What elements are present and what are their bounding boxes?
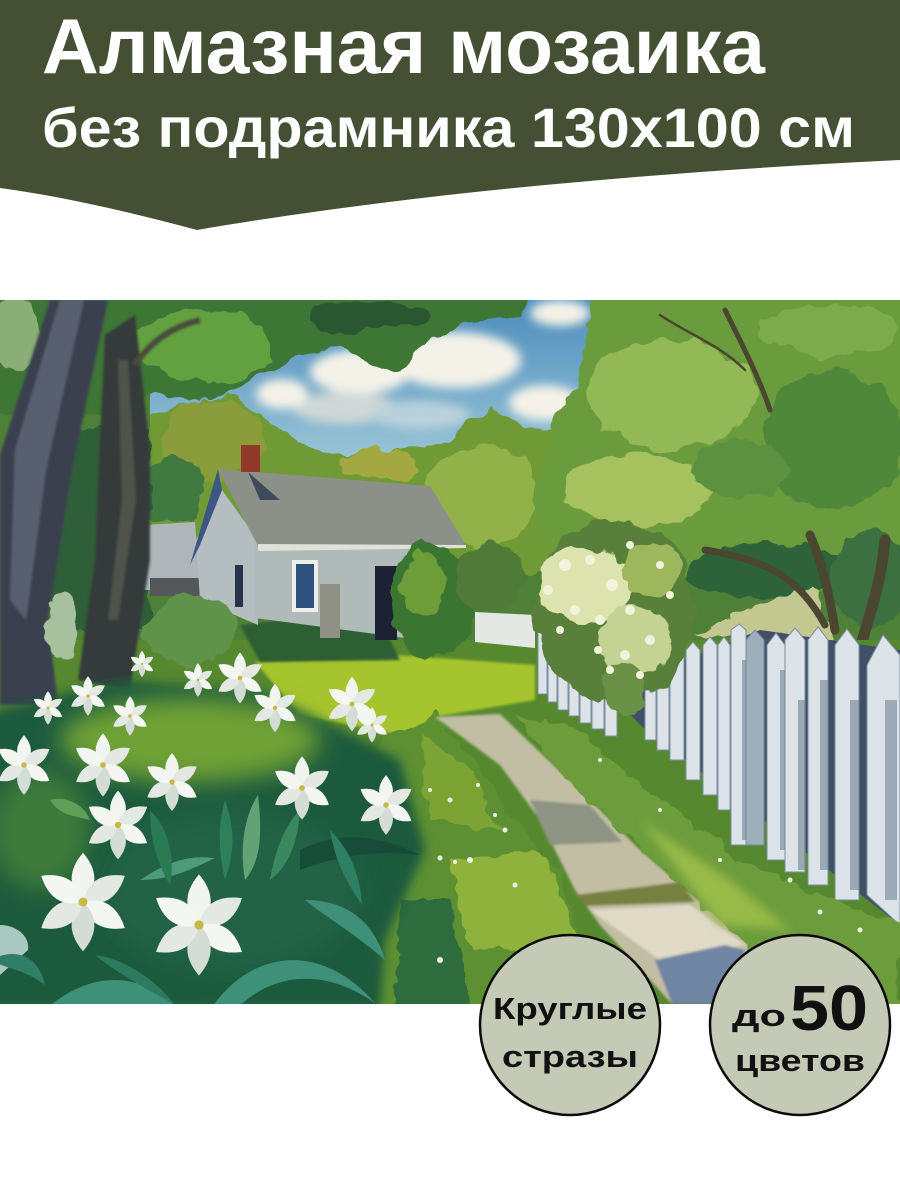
badge: round rhinestones bbox=[480, 935, 660, 1115]
badge: up to 50 colours: 50 bbox=[790, 972, 868, 1044]
dark hedge behind lawn bbox=[240, 615, 400, 662]
sky bbox=[150, 300, 591, 457]
clouds bbox=[256, 300, 590, 429]
subtitle: без подрамника 130х100 см bbox=[42, 96, 855, 159]
right tree foliage bbox=[530, 290, 900, 640]
cottage walls bbox=[196, 490, 258, 625]
picket fence bbox=[536, 624, 900, 925]
chimney bbox=[241, 445, 260, 472]
door bbox=[375, 566, 397, 640]
grass along fence bbox=[515, 715, 900, 1010]
fence shadows bbox=[742, 660, 897, 900]
back shed bbox=[142, 522, 200, 596]
ground bbox=[0, 640, 900, 1004]
lawn bbox=[255, 655, 535, 735]
lily flowers bbox=[0, 651, 415, 976]
flowering bush bbox=[535, 520, 695, 716]
badge: round rhinestones: стразы bbox=[502, 1039, 638, 1074]
top left canopy bbox=[0, 300, 528, 418]
banner shape bbox=[0, 0, 900, 230]
painting: summer cottage garden bbox=[0, 280, 900, 1010]
lily bed bbox=[0, 651, 425, 1010]
header banner bbox=[0, 0, 900, 230]
porch post bbox=[320, 584, 340, 638]
base colour bbox=[0, 394, 900, 640]
bush blossoms bbox=[543, 541, 674, 679]
stone path bbox=[435, 714, 750, 1004]
white meadow flowers bbox=[428, 758, 862, 963]
badge: up to 50 colours bbox=[710, 935, 890, 1115]
right tree branches bbox=[660, 310, 885, 650]
lily leaves bbox=[0, 795, 420, 1010]
cottage bbox=[190, 445, 466, 640]
left tree trunks bbox=[0, 300, 200, 705]
distant white fence bbox=[475, 612, 535, 648]
badge: round rhinestones: Круглые bbox=[493, 991, 647, 1026]
bush by cottage bbox=[390, 542, 524, 658]
cottage roof bbox=[218, 469, 466, 546]
meadow grass bbox=[386, 709, 576, 1004]
shrubs behind lilies bbox=[48, 590, 238, 664]
fence-side grass highlights bbox=[640, 820, 790, 930]
badge: up to 50 colours: цветов bbox=[735, 1043, 865, 1078]
title: Алмазная мозаика bbox=[42, 2, 766, 90]
background trees bbox=[50, 390, 570, 630]
window bbox=[292, 560, 318, 612]
badge: up to 50 colours: до bbox=[732, 998, 786, 1033]
